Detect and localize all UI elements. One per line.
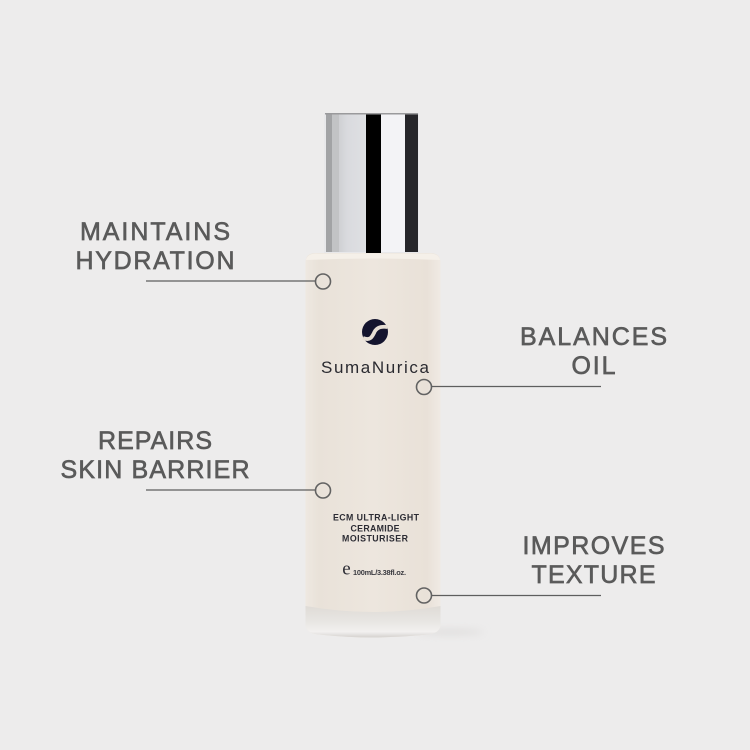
volume mark: e <box>342 558 351 580</box>
callout: improves texture: IMPROVES <box>522 532 664 560</box>
callout: balances oil: OIL <box>572 352 616 380</box>
frosted glass base <box>306 606 440 638</box>
callout: maintains hydration: MAINTAINS <box>80 218 230 246</box>
callout: repairs skin barrier <box>60 427 330 498</box>
bottle body <box>306 253 440 638</box>
product name: ECM ULTRA-LIGHT <box>333 512 420 522</box>
product name: MOISTURISER <box>342 534 409 544</box>
callout: repairs skin barrier: REPAIRS <box>98 427 212 455</box>
product name <box>333 512 420 544</box>
brand name: SumaNurica <box>321 358 430 377</box>
brand logo icon <box>362 319 388 345</box>
callout: balances oil <box>416 323 667 394</box>
product name: CERAMIDE <box>350 524 400 534</box>
bottle shadow <box>416 630 484 634</box>
volume mark: 100mL/3.38fl.oz. <box>353 568 406 577</box>
product bottle <box>306 113 440 638</box>
silver cap <box>324 113 419 253</box>
callout: improves texture <box>416 532 664 603</box>
callout: repairs skin barrier: SKIN BARRIER <box>60 456 250 484</box>
callout: improves texture: TEXTURE <box>532 561 656 589</box>
bottle shoulder highlight <box>306 254 440 260</box>
callout: maintains hydration: HYDRATION <box>76 247 234 275</box>
callout: maintains hydration <box>76 218 330 289</box>
volume mark <box>342 558 406 580</box>
callout: balances oil: BALANCES <box>520 323 667 351</box>
